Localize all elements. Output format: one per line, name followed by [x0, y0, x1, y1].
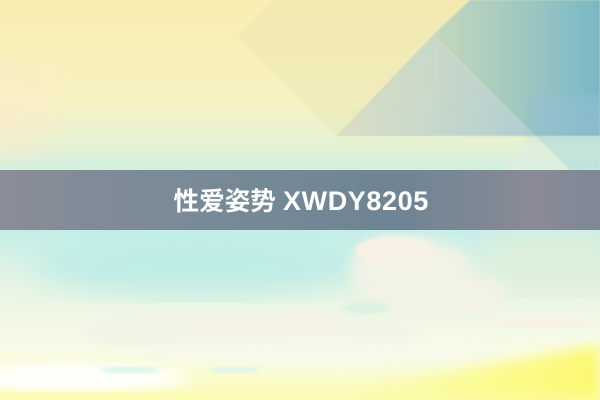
diamond shape — [238, 0, 470, 136]
sunlit yellow glow — [300, 345, 600, 400]
clouds — [80, 238, 510, 366]
right gradient shape — [433, 0, 600, 136]
title band — [0, 170, 600, 230]
triangle shape — [336, 35, 535, 136]
title: 性爱姿势 XWDY8205 — [174, 186, 429, 216]
lower sky colour — [30, 228, 370, 296]
